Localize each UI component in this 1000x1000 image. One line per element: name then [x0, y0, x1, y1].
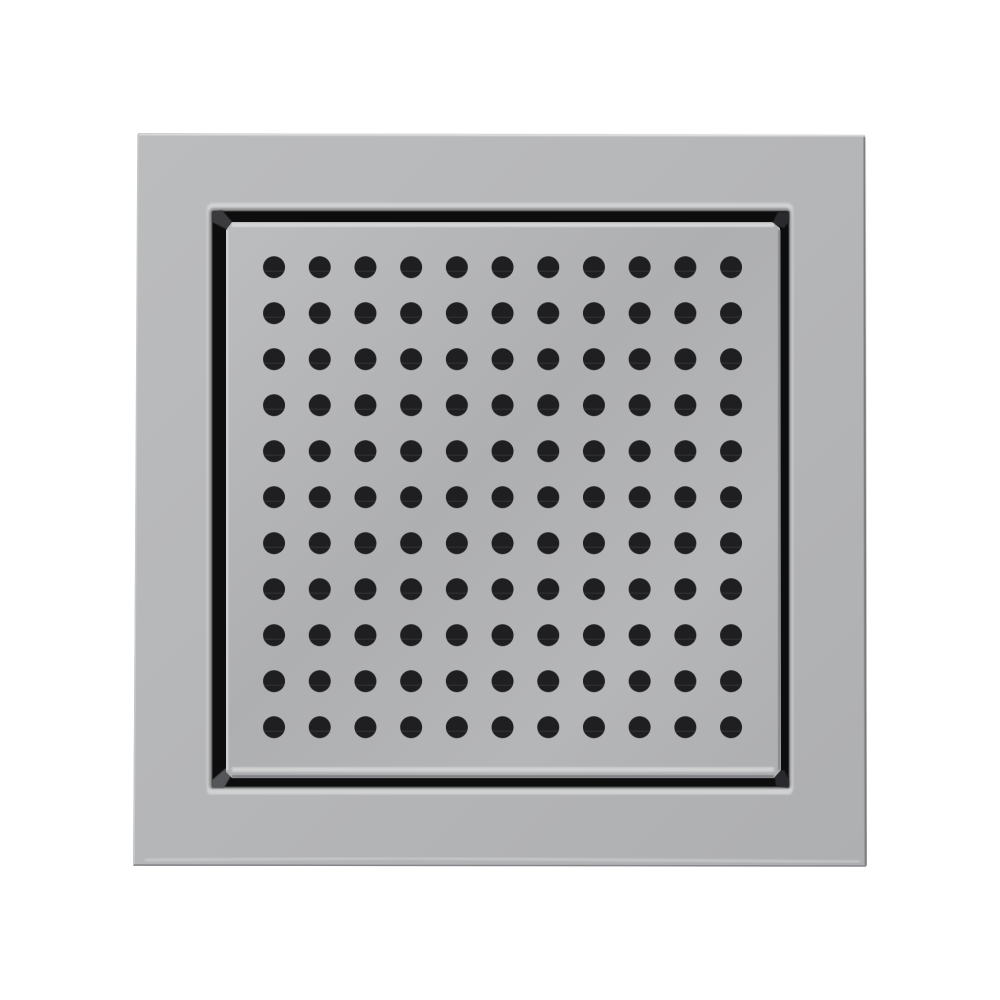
perforated plate: [226, 222, 781, 778]
outer frame: [133, 133, 867, 866]
drain holes grid: [251, 244, 754, 750]
recess channel: [207, 203, 793, 794]
